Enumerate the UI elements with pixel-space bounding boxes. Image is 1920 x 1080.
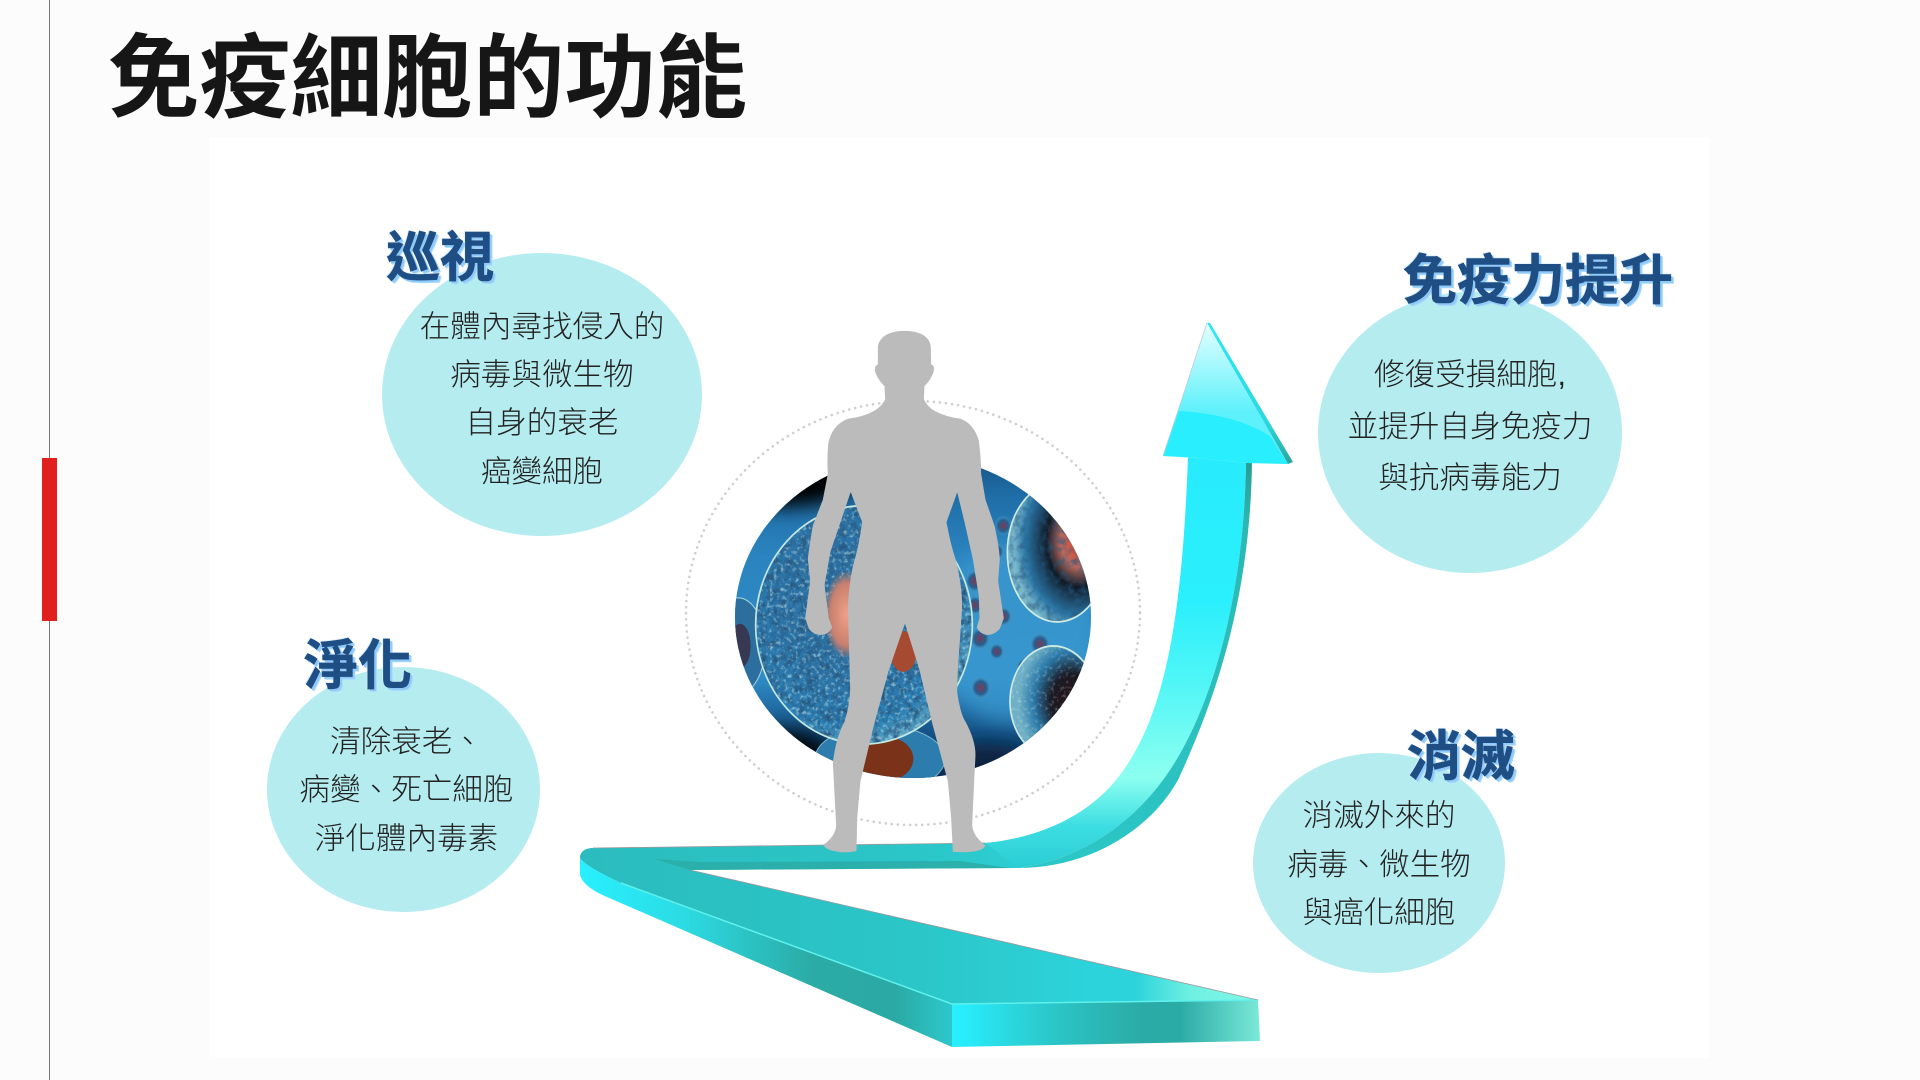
rising arrow <box>580 323 1293 1047</box>
text: 免疫力提升 description: 修復受損細胞, <box>1374 358 1566 392</box>
text: 消滅 description: 消滅外來的 <box>1303 799 1455 833</box>
bubble: 消滅 <box>1253 753 1505 973</box>
red accent bar <box>42 458 57 621</box>
text: 淨化 description: 淨化體內毒素 <box>315 822 498 856</box>
large cell <box>756 506 972 744</box>
panel: 淨化 <box>267 636 540 912</box>
text: 消滅 description: 與癌化細胞 <box>1303 896 1455 930</box>
heading: 消滅: 消滅 <box>1407 727 1515 787</box>
bubble: 淨化 <box>267 667 540 912</box>
panel: 巡視 <box>382 228 702 536</box>
text: 巡視 description: 癌變細胞 <box>481 455 603 489</box>
lower cell <box>816 730 944 778</box>
text: 免疫力提升 description: 與抗病毒能力 <box>1378 461 1562 495</box>
text: 巡視 description: 病毒與微生物 <box>450 358 634 392</box>
right bottom cell <box>1009 645 1084 743</box>
heading: 巡視: 巡視 <box>386 228 494 288</box>
dotted ring <box>686 401 1140 825</box>
text: 免疫力提升 description: 並提升自身免疫力 <box>1348 410 1592 444</box>
panel: 免疫力提升 <box>1318 251 1674 573</box>
cell: far left <box>735 597 762 687</box>
human silhouette <box>806 331 1003 852</box>
central graphic: cells, human figure and rising arrow <box>580 323 1293 1047</box>
heading: 淨化: 淨化 <box>304 636 412 696</box>
left vertical rule <box>49 0 50 1080</box>
text: 消滅 description: 病毒、微生物 <box>1287 848 1471 882</box>
spheres <box>995 516 1012 535</box>
white content panel <box>209 137 1709 1058</box>
text: 巡視 description <box>420 310 664 489</box>
bubble: 巡視 <box>382 253 702 536</box>
text: 淨化 description <box>299 725 514 856</box>
text: 巡視 description: 自身的衰老 <box>466 406 618 440</box>
bubble: 免疫力提升 <box>1318 292 1622 573</box>
cell photo disc <box>735 468 1091 778</box>
heading: 免疫力提升: 免疫力提升 <box>1403 251 1673 311</box>
title: 免疫細胞的功能 <box>108 28 747 130</box>
text: 免疫力提升 description <box>1348 358 1592 495</box>
right top cell <box>1006 494 1090 623</box>
text: 巡視 description: 在體內尋找侵入的 <box>420 310 664 344</box>
panel: 消滅 <box>1253 727 1517 973</box>
text: 淨化 description: 病變、死亡細胞 <box>299 773 514 807</box>
text: 淨化 description: 清除衰老、 <box>330 725 483 759</box>
text: 消滅 description <box>1287 799 1471 930</box>
